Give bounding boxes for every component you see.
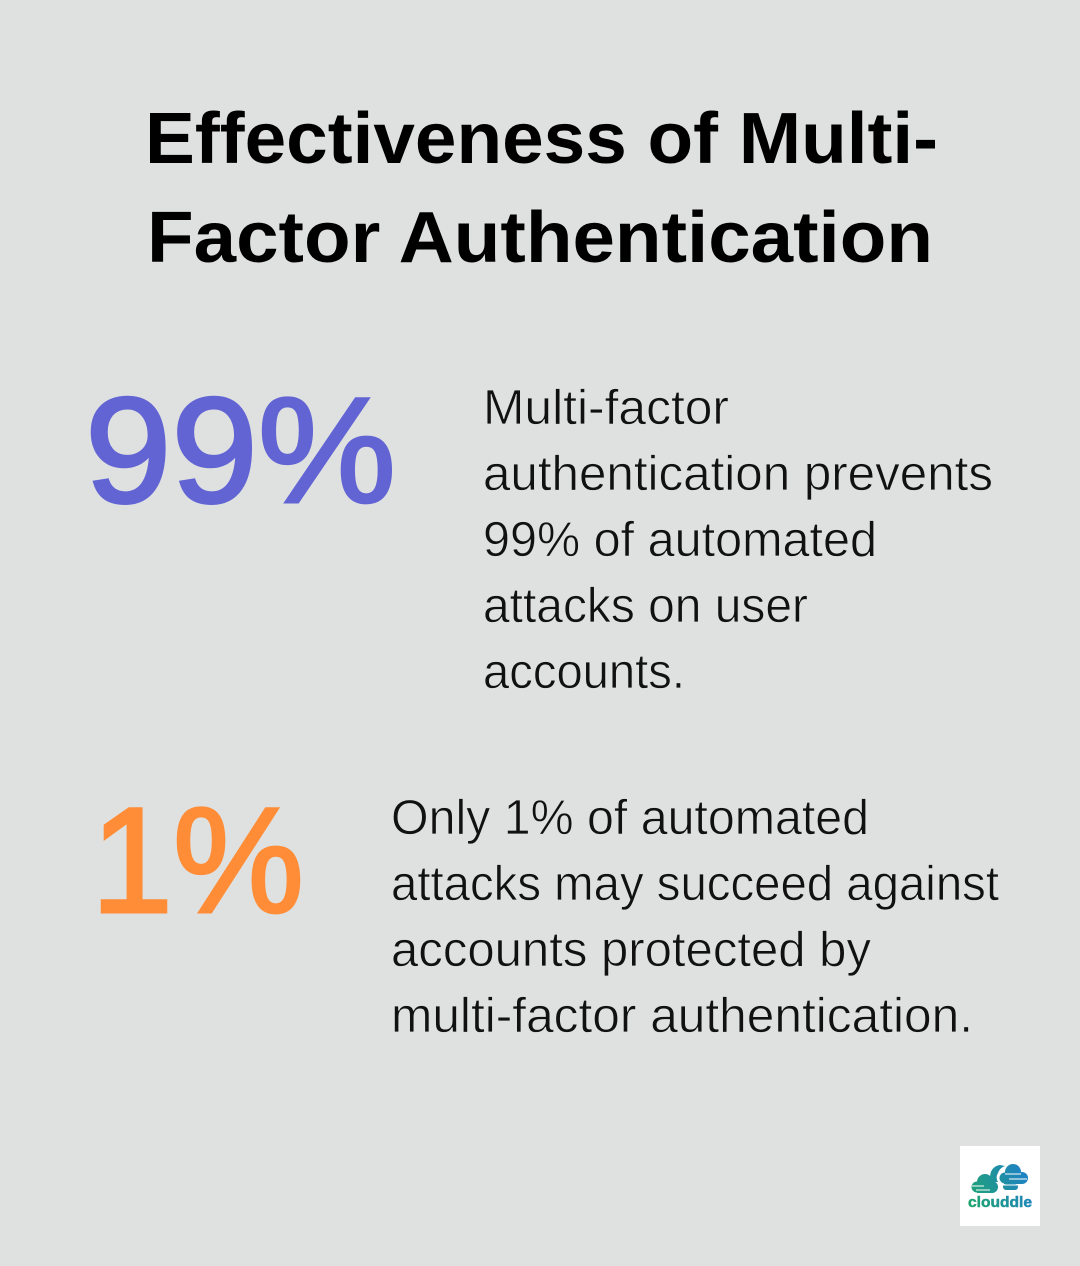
text block: 1% description: Only 1% of automated <box>391 791 869 845</box>
text block: 1% description: multi-factor authentication. <box>391 989 973 1043</box>
title: Effectiveness of Multi- <box>145 99 938 179</box>
stat: 1%: 1% <box>91 776 304 944</box>
text block: 99% description: attacks on user <box>483 579 808 633</box>
text block: 1% description <box>391 791 999 1043</box>
text block: 99% description: accounts. <box>483 645 685 699</box>
text block: 99% description: authentication prevents <box>483 447 993 501</box>
title: Factor Authentication <box>147 198 933 278</box>
logo: clouddle <box>960 1146 1040 1226</box>
text block: 1% description: attacks may succeed against <box>391 857 999 911</box>
wordmark: clouddle <box>968 1194 1032 1211</box>
stat: 99%: 99% <box>85 366 396 534</box>
text block: 1% description: accounts protected by <box>391 923 871 977</box>
icon: clouds <box>972 1164 1028 1193</box>
text block: 99% description: Multi-factor <box>483 381 729 435</box>
title <box>145 99 938 278</box>
text block: 99% description <box>483 381 993 699</box>
text block: 99% description: 99% of automated <box>483 513 877 567</box>
